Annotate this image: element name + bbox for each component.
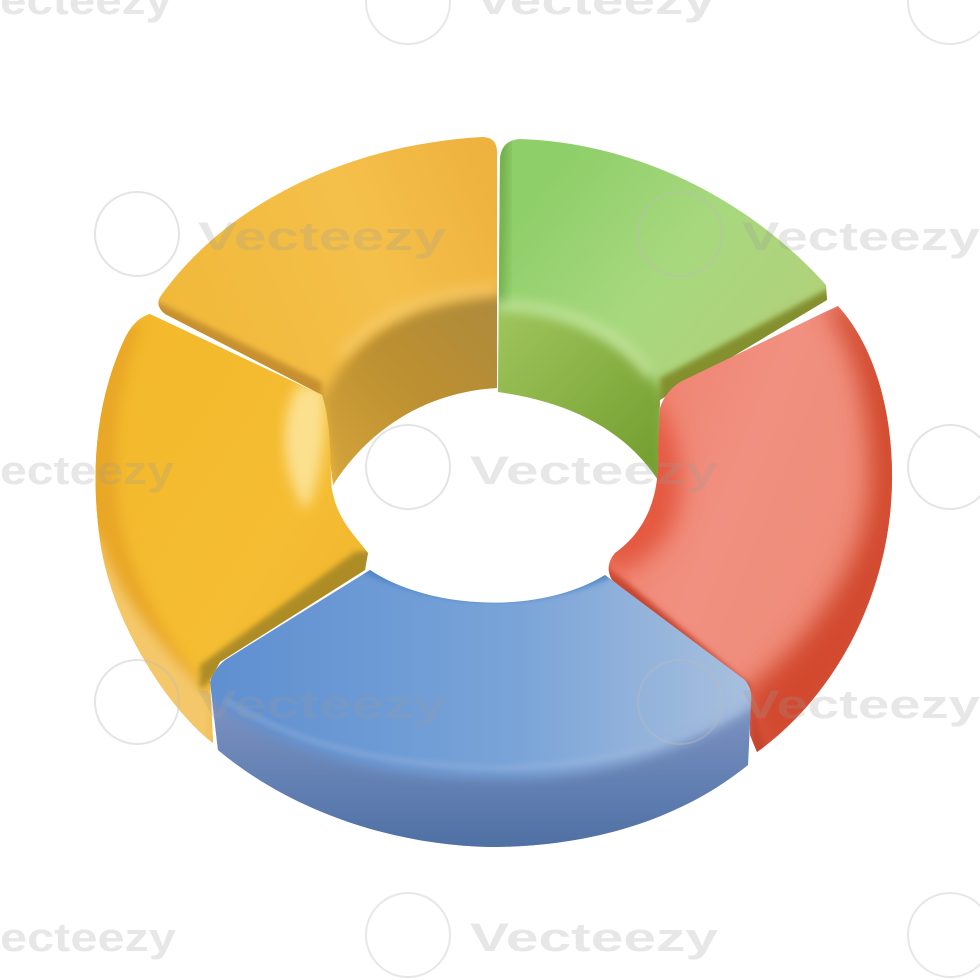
watermark row 1 bbox=[0, 0, 980, 44]
watermark row 5 bbox=[0, 893, 980, 977]
watermark row 2: Vecteezy bbox=[742, 215, 980, 259]
segment: left yellow bbox=[96, 314, 368, 743]
watermark row 2 bbox=[95, 192, 980, 276]
watermark row 4: Vecteezy bbox=[742, 683, 980, 727]
segment: blue bbox=[210, 570, 752, 847]
segment: red bbox=[608, 306, 892, 752]
watermark row 3: ecteezy bbox=[0, 449, 175, 493]
watermark row 4: Vecteezy bbox=[198, 683, 447, 727]
segment: green bbox=[498, 139, 827, 479]
donut chart bbox=[81, 130, 910, 880]
segment: upper-left yellow bbox=[158, 137, 497, 485]
watermark row 3: Vecteezy bbox=[470, 449, 719, 493]
watermark row 3 bbox=[0, 425, 980, 509]
watermark row 2: Vecteezy bbox=[198, 215, 447, 259]
watermark row 4 bbox=[95, 660, 980, 744]
watermark row 5: ecteezy bbox=[0, 916, 177, 960]
watermark row 5: Vecteezy bbox=[470, 916, 719, 960]
